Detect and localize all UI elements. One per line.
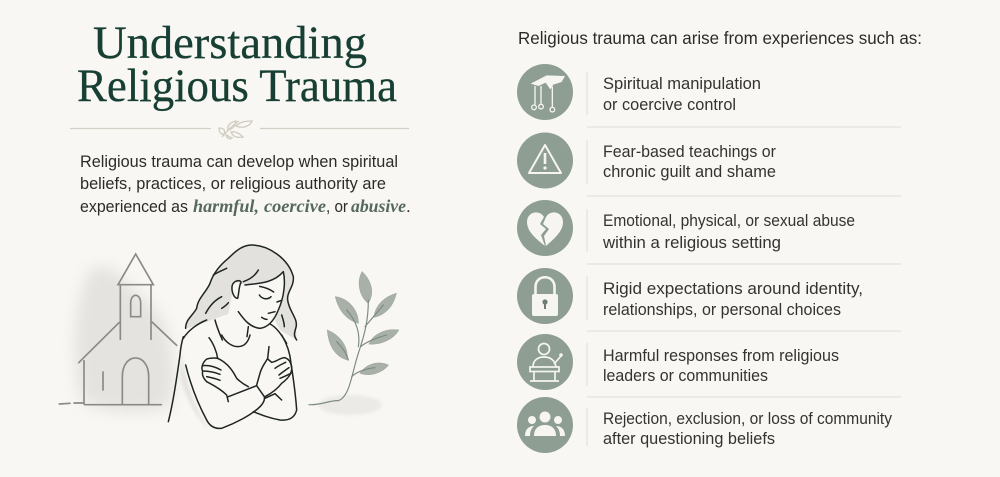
icon: warning triangle	[517, 132, 573, 188]
divider with leaf ornament	[70, 121, 409, 139]
intro text: .	[406, 197, 411, 216]
item 5: harmful responses	[517, 334, 839, 390]
right heading: Religious trauma can arise from experiences such as:	[518, 28, 922, 48]
intro text	[80, 152, 411, 216]
illustration: church	[59, 254, 177, 412]
item text	[602, 212, 855, 252]
intro text: coercive	[264, 196, 326, 216]
head and hair	[183, 245, 297, 343]
intro text: experienced as	[80, 197, 188, 216]
intro text: abusive	[351, 196, 406, 216]
item text	[603, 143, 776, 181]
list dividers	[587, 72, 901, 446]
item text: relationships, or personal choices	[603, 301, 841, 319]
crossed arms	[168, 335, 297, 430]
intro text: , or	[326, 197, 348, 216]
intro text: beliefs, practices, or religious authority are	[80, 174, 386, 193]
item text: after questioning beliefs	[603, 430, 775, 448]
item text: leaders or communities	[603, 367, 768, 385]
item 6: rejection	[517, 397, 893, 453]
title	[77, 17, 397, 112]
item text: Emotional, physical, or sexual abuse	[603, 212, 855, 230]
item text: Harmful responses from religious	[603, 347, 839, 365]
item 1: spiritual manipulation	[517, 64, 761, 120]
item text: Fear-based teachings or	[603, 143, 776, 161]
item text: within a religious setting	[602, 234, 781, 252]
title: Religious Trauma	[77, 60, 397, 112]
intro text: Religious trauma can develop when spiritual	[80, 152, 398, 171]
item text: or coercive control	[603, 96, 736, 114]
item text: Rejection, exclusion, or loss of community	[603, 410, 893, 428]
item text: Spiritual manipulation	[603, 75, 761, 93]
item 3: abuse	[517, 200, 855, 256]
icon: broken heart	[517, 200, 573, 256]
icon: hand with puppet strings	[517, 64, 573, 120]
icon: group of people	[517, 397, 573, 453]
item 4: rigid expectations	[517, 268, 863, 324]
item text: chronic guilt and shame	[603, 163, 776, 181]
icon: padlock	[517, 268, 573, 324]
item text	[603, 280, 863, 319]
illustration: church, woman, plant	[59, 245, 399, 430]
item text: Rigid expectations around identity,	[603, 280, 863, 298]
item text	[603, 75, 761, 114]
item text	[603, 410, 893, 448]
item 2: fear-based teachings	[517, 132, 776, 188]
item text	[603, 347, 839, 385]
illustration: plant	[309, 272, 399, 415]
icon: speaker at lectern	[517, 334, 573, 390]
intro text: harmful,	[193, 196, 259, 216]
title: Understanding	[93, 17, 367, 69]
illustration: woman	[168, 245, 297, 430]
